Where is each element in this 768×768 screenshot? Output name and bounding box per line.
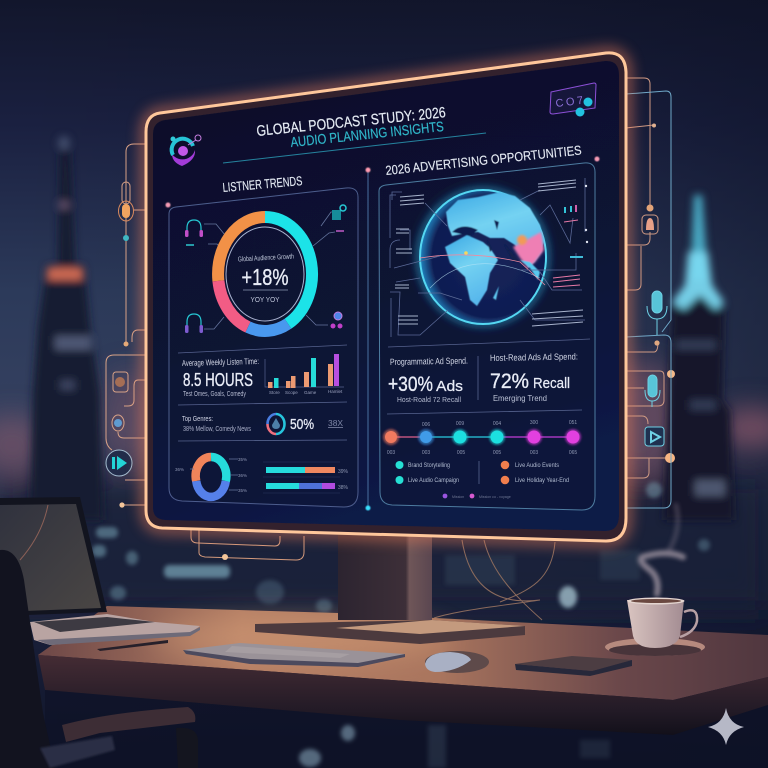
logo: [170, 135, 201, 166]
timeline: 003: [387, 450, 395, 456]
donut chart: genres: [175, 457, 247, 497]
ring chart: global audience growth: [218, 217, 312, 331]
legend: Mission co - voyage: [479, 495, 511, 499]
pen: [97, 640, 168, 651]
stat: host-read ads: Emerging Trend: [493, 393, 547, 403]
circuit lines: right side: [626, 78, 675, 508]
timeline: 300: [530, 420, 538, 426]
legend: Live Audio Events: [515, 462, 560, 469]
stat: host-read ads: Recall: [533, 375, 570, 392]
timeline: 005: [457, 450, 465, 456]
stat: host-read ads: 72%: [490, 370, 529, 393]
legend: [396, 461, 569, 499]
legend: Live Audio Campaign: [408, 477, 459, 484]
icon: sparkle watermark: [708, 708, 744, 745]
monitor stand: [255, 535, 525, 644]
icon: left profile badge: [113, 372, 128, 392]
icon: right person badge: [642, 215, 658, 234]
circuit lines: below monitor: [191, 530, 304, 560]
stat: top genres: 50%: [290, 416, 314, 433]
timeline: 009: [456, 421, 464, 427]
stat: weekly listen time: 8.5 HOURS: [183, 370, 253, 390]
stat: programmatic ad spend: Host-Roald 72 Recall: [397, 397, 461, 404]
icon: left orange capsule: [118, 182, 134, 221]
monitor neon glow: [146, 53, 626, 541]
timeline: 065: [569, 450, 577, 456]
stat: programmatic ad spend: [388, 356, 468, 404]
icon: left gear dot: [112, 415, 124, 431]
laptop: [0, 497, 200, 645]
bar chart: listen time: Hamlet: [328, 389, 343, 394]
mouse: [425, 651, 489, 673]
icon: right play badge: [645, 427, 664, 446]
stat: audience growth: YOY YOY: [250, 295, 280, 304]
stat: audience growth: +18%: [242, 264, 288, 290]
stat: programmatic ad spend: +30%: [388, 373, 433, 396]
icon: left play button: [106, 450, 132, 476]
floor shadow under desk: [45, 690, 768, 768]
stat: programmatic ad spend: Ads: [436, 378, 463, 395]
badge: top right code: [550, 83, 596, 116]
stat: top genres: Top Genres:: [182, 414, 213, 423]
keyboard: [183, 643, 405, 667]
coffee cup with saucer: [605, 598, 705, 656]
heading: listener trends: LISTNER TRENDS: [222, 173, 303, 195]
donut chart: genres: 36%: [175, 467, 184, 472]
donut chart: genres: 36%: [238, 473, 247, 478]
bokeh under desk: [299, 725, 610, 768]
stat: programmatic ad spend: Programmatic Ad Spend.: [390, 356, 468, 367]
bar chart: listen time: [265, 354, 344, 395]
desk: [38, 606, 768, 735]
circuit lines: left side: [106, 144, 146, 508]
timeline: 006: [422, 422, 430, 428]
heading: advertising opportunities: 2026 ADVERTISING OPPORTUNITIES: [385, 142, 583, 178]
title: GLOBAL PODCAST STUDY: 2026: [256, 104, 446, 140]
center divider: [366, 168, 370, 510]
stat: top genres: 38% Mellow, Comedy News: [183, 426, 251, 433]
stacked bars: 39%: [338, 469, 349, 475]
globe: continents: [445, 192, 544, 306]
legend: Live Holiday Year-End: [515, 477, 569, 484]
timeline: 003: [530, 450, 538, 456]
stacked bars: 38%: [338, 485, 349, 491]
donut chart: genres: 35%: [238, 488, 247, 493]
timeline: 003: [422, 450, 430, 456]
left tower: [30, 136, 103, 520]
city bokeh: [92, 482, 710, 613]
subtitle: AUDIO PLANNING INSIGHTS: [290, 118, 444, 150]
legend: Mission: [452, 495, 464, 499]
right tower: [664, 195, 734, 520]
icon: right microphone large: [647, 291, 667, 335]
stat: weekly listen time: Average Weekly Listen Time:: [182, 356, 259, 368]
icon: right microphone small: [645, 375, 660, 407]
ring chart: fifty percent: [268, 414, 284, 434]
stat: weekly listen time: Test Omes, Goals, Comedy: [183, 391, 246, 398]
timeline: 051: [569, 420, 577, 426]
legend: Brand Storytelling: [408, 462, 450, 469]
timeline: 004: [493, 421, 501, 427]
badge: top right code: CO7: [555, 94, 586, 110]
stat: top genres: 38X: [328, 419, 344, 428]
stacked bars: [263, 462, 349, 493]
bar chart: listen time: Store: [269, 390, 280, 395]
stat: host-read ads: Host-Read Ads Ad Spend:: [490, 351, 578, 363]
monitor screen: [153, 61, 619, 531]
chair: [0, 550, 198, 768]
steam: [641, 505, 683, 594]
monitor frame: [146, 53, 626, 541]
donut chart: genres: 35%: [238, 457, 247, 462]
monitor cables: [434, 540, 555, 620]
callouts around globe: [390, 178, 588, 337]
icon: location pin: [306, 312, 342, 328]
stat: weekly listen time: [182, 356, 259, 398]
timeline: 005: [493, 450, 501, 456]
icon: share box: [313, 205, 346, 246]
panel: advertising opportunities: [379, 163, 595, 510]
bar chart: listen time: Game: [304, 390, 317, 395]
stat: host-read ads: [490, 351, 578, 403]
notebook: [515, 656, 632, 676]
stat: audience growth: [238, 254, 294, 304]
stat: audience growth: Global Audience Growth: [238, 254, 294, 263]
bar chart: listen time: Scope: [285, 390, 298, 395]
timeline: [383, 420, 581, 456]
icon: headphones bottom: [185, 314, 224, 333]
globe: [415, 186, 551, 328]
panel: listener trends: [166, 188, 358, 507]
icon: headphones top: [185, 220, 226, 254]
stat: top genres: [182, 414, 344, 433]
